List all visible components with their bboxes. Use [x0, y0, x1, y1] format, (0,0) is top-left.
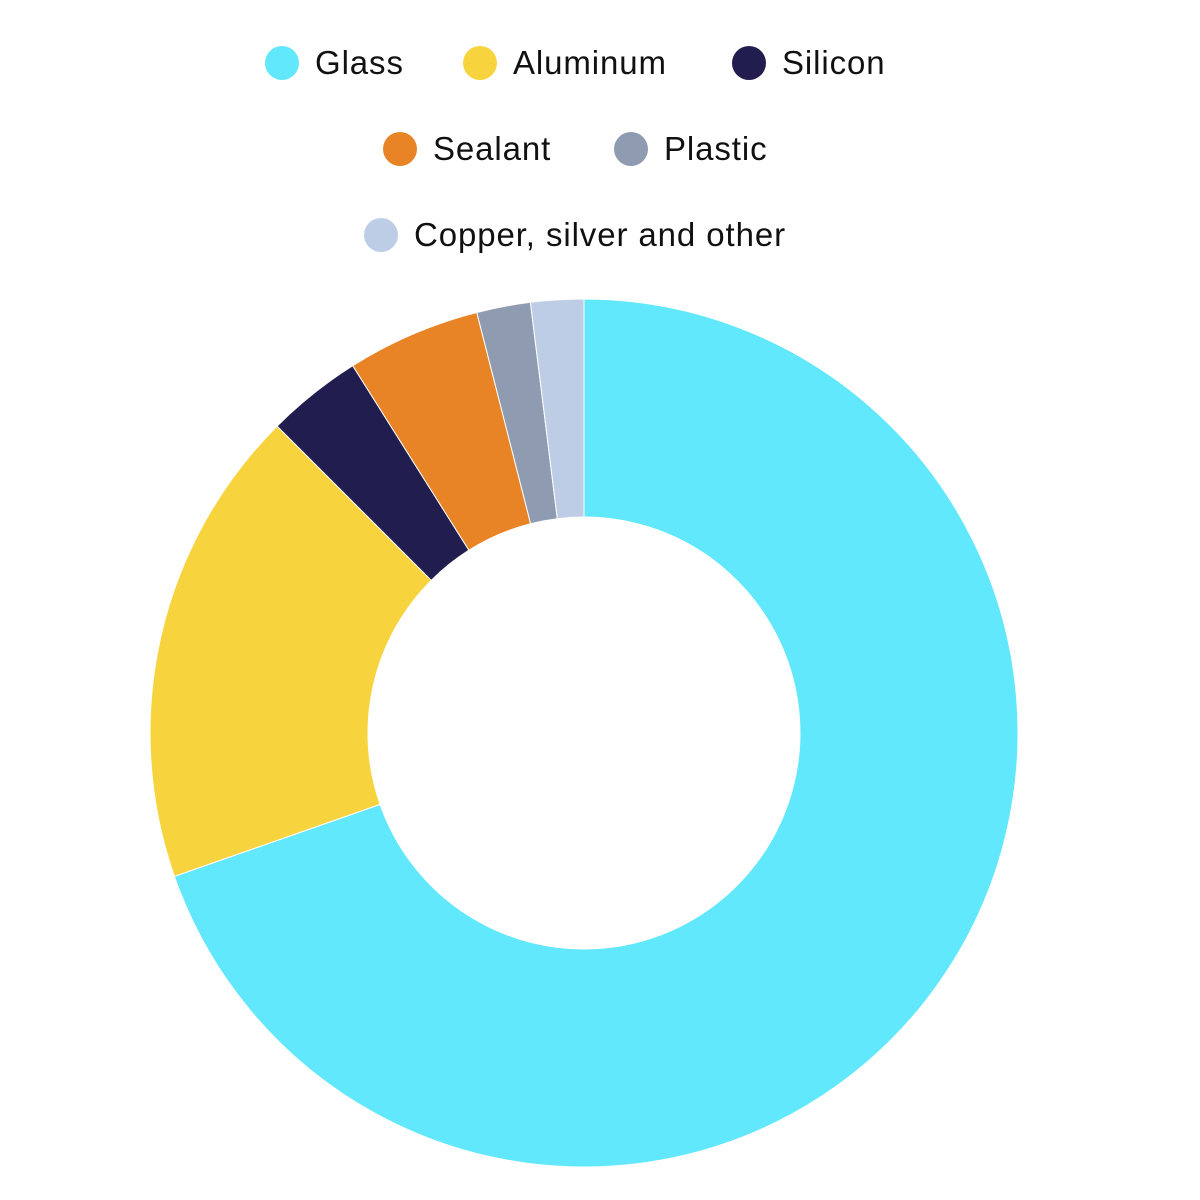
legend: copper, silver and other: Copper, silver and other [414, 216, 786, 253]
legend: plastic [614, 130, 768, 167]
segment: glass [174, 299, 1018, 1167]
legend [265, 44, 886, 253]
segment: silicon [277, 366, 469, 580]
legend: glass [265, 44, 404, 81]
legend: sealant: Sealant [433, 130, 551, 167]
legend: silicon [732, 44, 886, 81]
legend: aluminum: Aluminum [513, 44, 667, 81]
segment: copper, silver and other [530, 299, 584, 519]
legend: glass: Glass [315, 44, 404, 81]
segment: plastic [477, 302, 557, 524]
segment: sealant [353, 312, 531, 550]
legend: silicon: Silicon [782, 44, 886, 81]
legend: plastic: Plastic [664, 130, 768, 167]
segment: aluminum [150, 426, 431, 876]
